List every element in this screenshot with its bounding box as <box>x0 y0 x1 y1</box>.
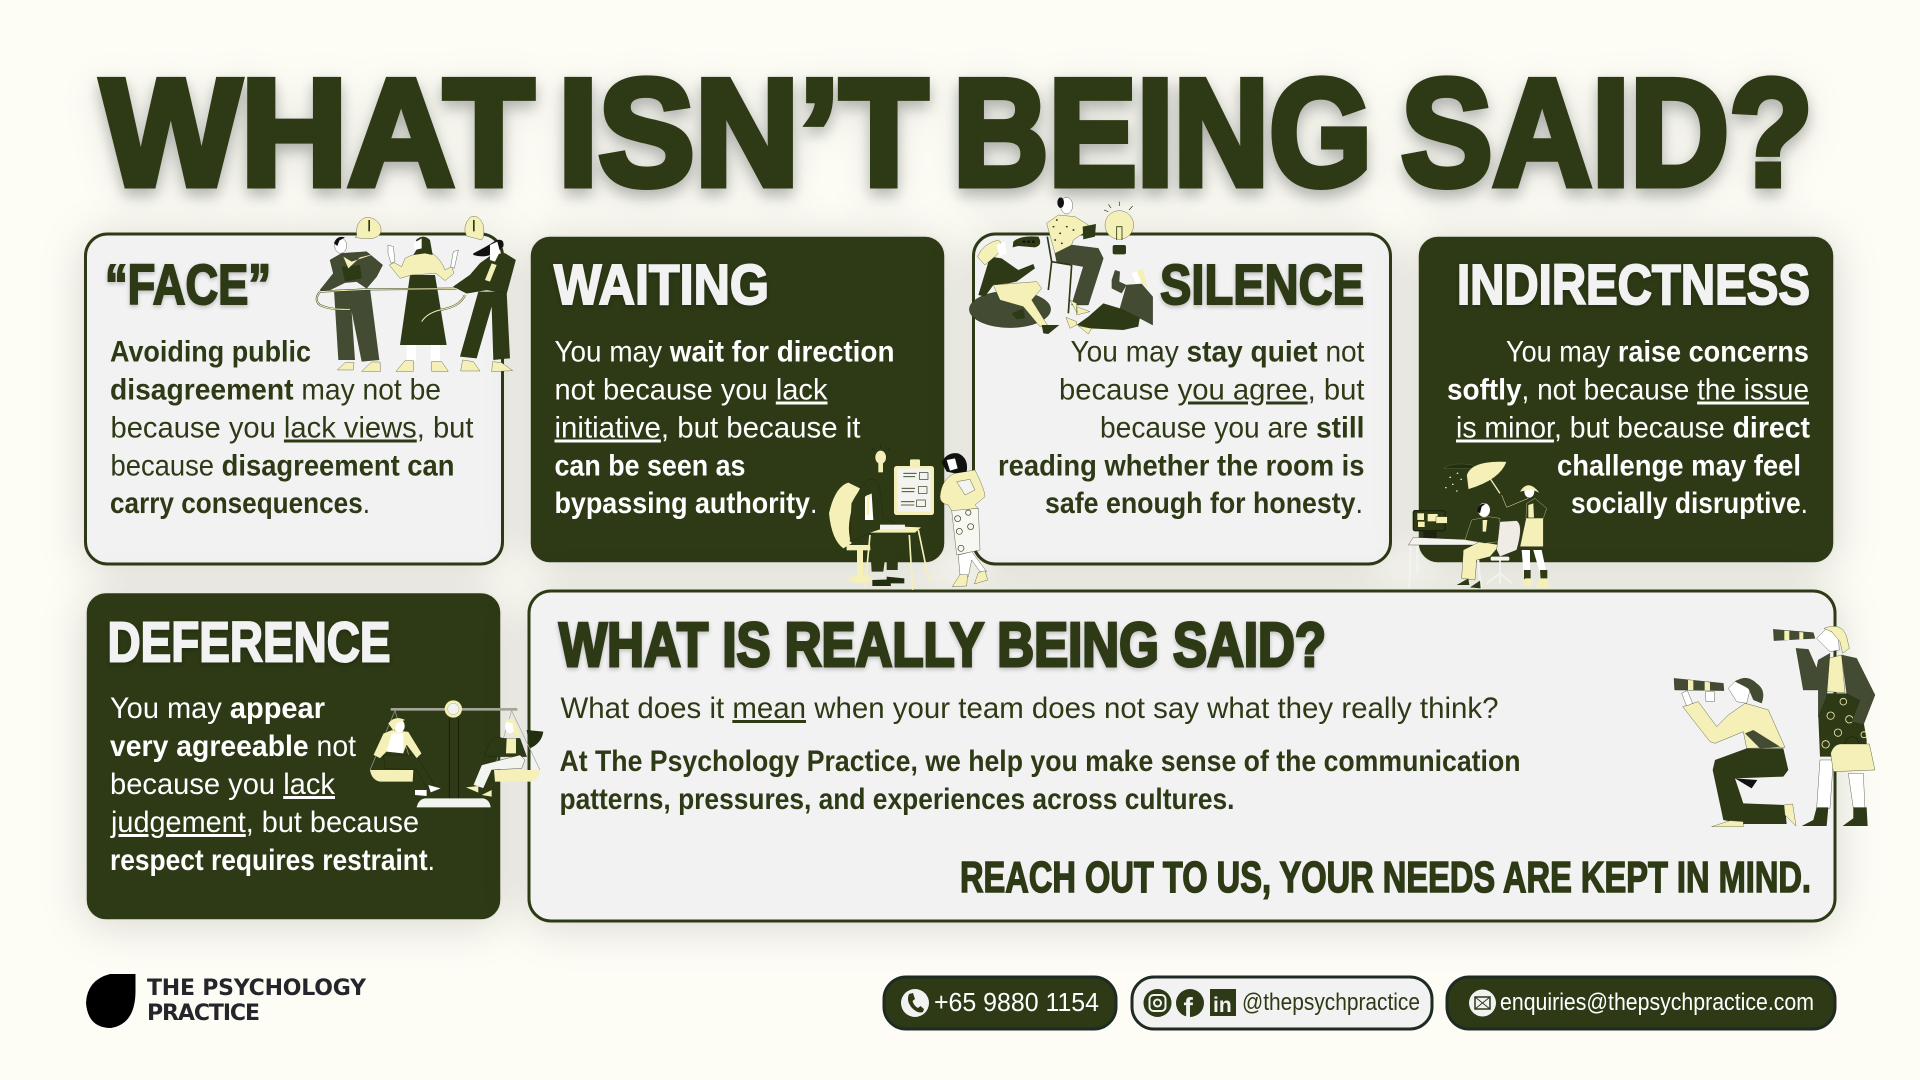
face body text: disagreement may not be <box>110 374 441 406</box>
logo wordmark: PRACTICE <box>147 1001 260 1026</box>
face body text: Avoiding public <box>110 336 311 368</box>
waiting body text: bypassing authority. <box>554 487 818 520</box>
face panel background <box>86 234 502 564</box>
illustration: woman holding umbrella over man at desk <box>1408 461 1549 589</box>
deference body text: respect requires restraint. <box>110 844 435 877</box>
silence body text: You may stay quiet not <box>1070 336 1365 368</box>
main panel question: What does it mean when your team does not say what they really think? <box>560 692 1498 725</box>
icon: linkedin <box>1210 989 1236 1017</box>
waiting body text: You may wait for direction <box>554 336 894 368</box>
indirectness body text: challenge may feel <box>1557 450 1801 482</box>
contact: social pill <box>1132 977 1432 1029</box>
face body text: because disagreement can <box>110 450 454 482</box>
panel: silence <box>974 234 1390 564</box>
main panel description <box>560 745 1520 816</box>
title: ISN’T <box>558 48 928 218</box>
silence body text: safe enough for honesty. <box>1045 487 1363 520</box>
silence body text <box>998 336 1365 520</box>
indirectness panel background <box>1418 236 1834 563</box>
face body text: carry consequences. <box>110 487 370 520</box>
title <box>101 48 1813 218</box>
illustration: people balancing on a scale <box>370 700 543 807</box>
waiting panel background <box>530 236 945 563</box>
waiting body text: can be seen as <box>554 450 746 482</box>
indirectness body text <box>1447 336 1810 520</box>
logo wordmark <box>147 976 367 1026</box>
deference body text: because you lack <box>110 768 336 801</box>
panel: indirectness <box>1418 236 1834 563</box>
main panel background <box>529 591 1835 921</box>
logo wordmark: THE PSYCHOLOGY <box>147 976 367 1001</box>
indirectness body text: is minor, but because direct <box>1456 412 1810 444</box>
panel: waiting <box>530 236 945 563</box>
silence heading: SILENCE <box>1160 253 1364 317</box>
face heading: “FACE” <box>105 253 271 317</box>
phone number: +65 9880 1154 <box>934 987 1099 1017</box>
panel: face <box>86 234 502 564</box>
contact: email pill <box>1447 977 1835 1029</box>
social handle: @thepsychpractice <box>1242 989 1420 1016</box>
title: WHAT <box>101 48 534 218</box>
silence body text: reading whether the room is <box>998 450 1364 482</box>
panel: deference <box>86 592 501 920</box>
icon: linkedin: in <box>1213 994 1232 1017</box>
face body text: because you lack views, but <box>110 412 474 444</box>
logo mark <box>86 974 136 1028</box>
deference panel background <box>86 592 501 920</box>
waiting heading: WAITING <box>554 253 769 317</box>
waiting body text <box>554 336 894 520</box>
face body text <box>110 336 474 520</box>
main panel description: At The Psychology Practice, we help you make sense of the communication <box>560 745 1520 778</box>
main panel description: patterns, pressures, and experiences across cultures. <box>560 783 1234 816</box>
indirectness body text: socially disruptive. <box>1571 487 1808 520</box>
illustration: man at desk with clipboard and woman <box>829 445 988 590</box>
waiting body text: initiative, but because it <box>554 412 861 444</box>
silence body text: because you agree, but <box>1059 374 1365 406</box>
icon: facebook: f <box>1184 992 1194 1023</box>
indirectness body text: softly, not because the issue <box>1447 374 1809 406</box>
waiting body text: not because you lack <box>554 374 828 406</box>
icon: facebook <box>1176 989 1204 1023</box>
illustration: three people tugging a rope <box>317 216 516 372</box>
silence body text: because you are still <box>1100 412 1364 444</box>
title: BEING <box>953 48 1372 218</box>
main panel heading: WHAT IS REALLY BEING SAID? <box>559 611 1326 680</box>
indirectness body text: You may raise concerns <box>1506 336 1809 368</box>
deference body text: very agreeable not <box>110 730 357 763</box>
icon: instagram <box>1144 989 1172 1017</box>
icon: email <box>1469 990 1496 1016</box>
panel: what is really being said <box>529 591 1835 921</box>
logo <box>86 974 367 1028</box>
icon: phone <box>901 989 929 1017</box>
title: SAID? <box>1401 48 1813 218</box>
illustration: two people with telescopes <box>1674 626 1875 827</box>
silence panel background <box>974 234 1390 564</box>
deference body text: judgement, but because <box>110 806 419 839</box>
deference body text <box>110 692 435 877</box>
contact: phone pill <box>884 977 1116 1029</box>
deference heading: DEFERENCE <box>108 610 390 674</box>
indirectness heading: INDIRECTNESS <box>1457 253 1810 317</box>
illustration: three people talking with light bulb <box>969 197 1153 334</box>
deference body text: You may appear <box>110 692 325 725</box>
email address: enquiries@thepsychpractice.com <box>1500 989 1814 1016</box>
